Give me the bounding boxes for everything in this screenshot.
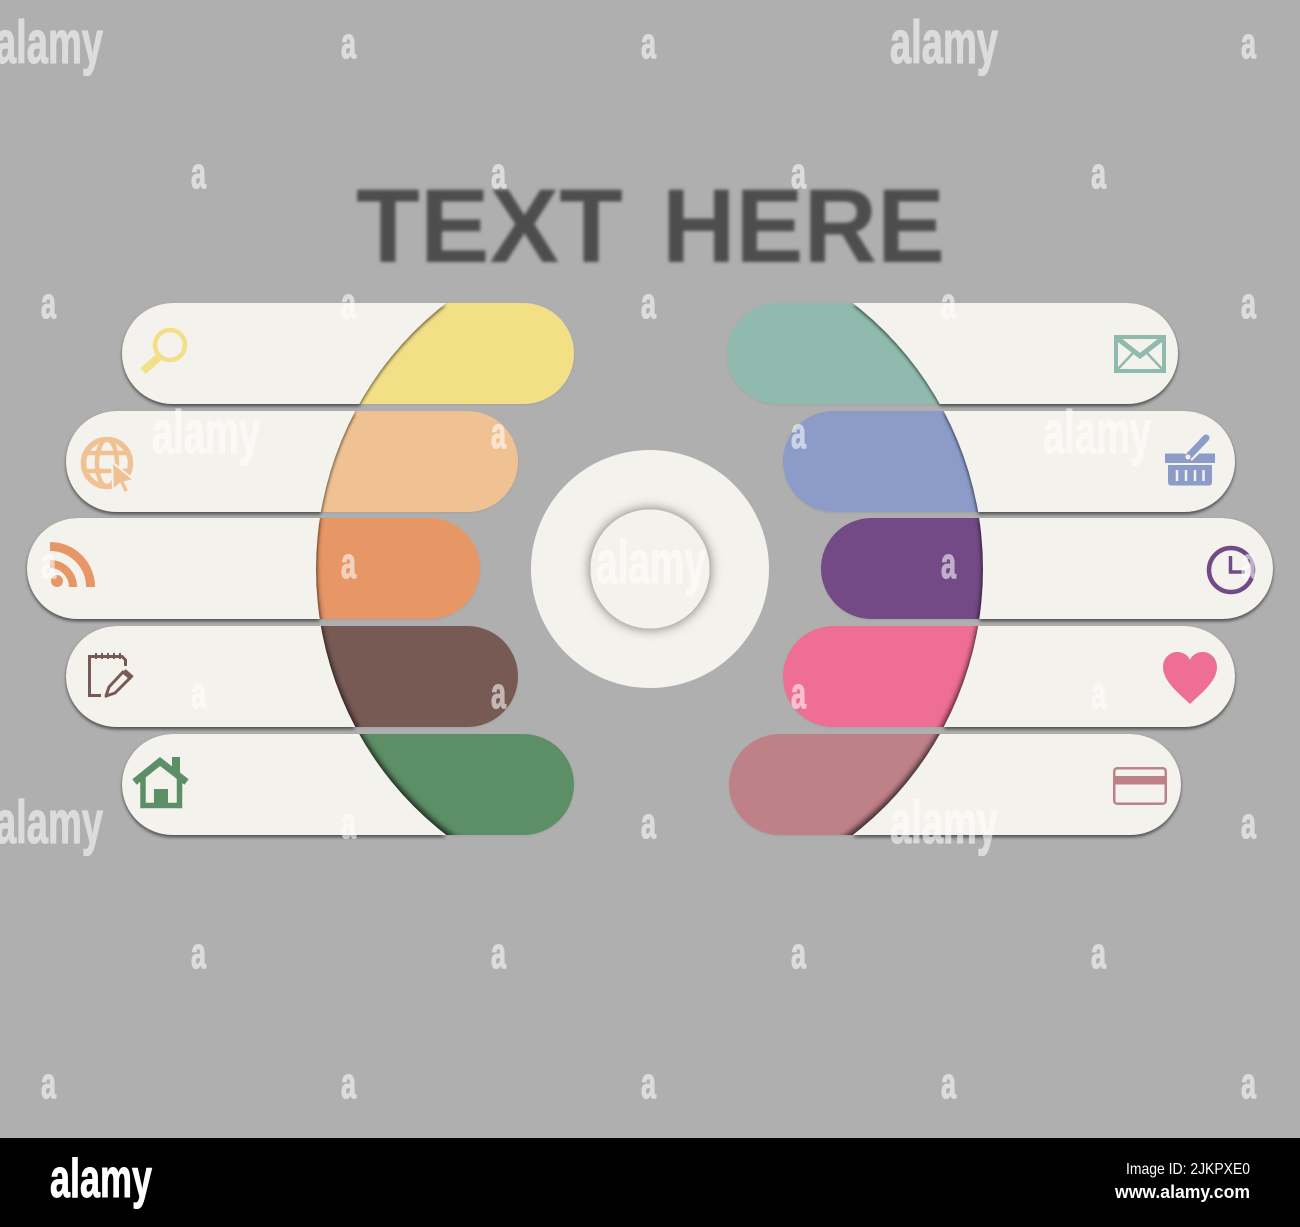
watermark: a (191, 929, 206, 978)
watermark: a (41, 539, 56, 588)
watermark: a (41, 279, 56, 328)
panel: right bar 5 card (729, 734, 1183, 840)
panel: left bar 1 search (120, 303, 574, 408)
watermark: a (941, 279, 956, 328)
watermark: alamy (890, 9, 998, 76)
watermark: a (1241, 539, 1256, 588)
icon: globe with cursor (84, 440, 134, 493)
watermark: a (491, 149, 506, 198)
cream strip (64, 626, 356, 732)
watermark: a (41, 1059, 56, 1108)
arc shadow (66, 411, 358, 512)
arc shadow (936, 626, 1235, 727)
arc shadow (975, 518, 1273, 619)
panel: left bar 5 home (120, 734, 574, 840)
watermark: a (1241, 19, 1256, 68)
watermark: a (1241, 279, 1256, 328)
watermark: a (1091, 149, 1106, 198)
watermark: a (791, 149, 806, 198)
watermark: a (341, 19, 356, 68)
coloured end: pink (783, 626, 1235, 727)
panel: left bar 2 web (64, 411, 518, 516)
cream strip (64, 411, 356, 516)
title: TEXT (356, 168, 623, 285)
watermark: a (641, 279, 656, 328)
coloured end: blue (783, 411, 1235, 512)
icon: heart (1163, 652, 1217, 704)
watermark: a (791, 929, 806, 978)
watermark: a (341, 799, 356, 848)
footer logo: alamy (50, 1147, 152, 1209)
coloured end: yellow (122, 303, 574, 404)
watermark: a (1241, 1059, 1256, 1108)
coloured end: teal (727, 303, 1178, 404)
watermark: a (191, 669, 206, 718)
outer disc (531, 450, 769, 688)
coloured end: brown (66, 626, 518, 727)
panel: right bar 1 mail (727, 303, 1180, 408)
cream strip (120, 734, 446, 840)
arc shadow (908, 303, 1178, 404)
panel: right bar 2 basket (783, 411, 1237, 516)
coloured end: orange (27, 518, 480, 619)
watermark: alamy (152, 399, 260, 466)
icon: clock (1209, 548, 1253, 592)
panel: left bar 4 notes (64, 626, 518, 732)
footer band (0, 1138, 1300, 1227)
watermark: a (341, 539, 356, 588)
watermark: alamy (0, 789, 103, 856)
watermark: a (1091, 929, 1106, 978)
footer background (0, 1138, 1300, 1227)
arc shadow (122, 734, 459, 835)
title (356, 168, 945, 285)
watermark: a (1091, 669, 1106, 718)
image id: Image ID: 2JKPXE0 (1126, 1161, 1250, 1178)
icon: house (134, 757, 186, 807)
arc shadow (66, 626, 362, 727)
watermark: a (191, 149, 206, 198)
arc shadow (840, 734, 1181, 835)
cream strip (120, 303, 447, 408)
watermark: a (1241, 799, 1256, 848)
watermark: a (641, 1059, 656, 1108)
watermark: a (641, 799, 656, 848)
watermark: a (791, 669, 806, 718)
icon: notepad with pencil (90, 653, 132, 697)
icon: rss (50, 546, 90, 587)
icon: magnifier (143, 330, 185, 371)
arc shadow (122, 303, 447, 404)
watermark: a (491, 929, 506, 978)
panel: right bar 4 heart (783, 626, 1237, 732)
coloured end: green (122, 734, 574, 835)
watermark: a (641, 19, 656, 68)
watermark: a (491, 409, 506, 458)
inner disc (590, 510, 710, 628)
watermark: a (341, 1059, 356, 1108)
cream strip (978, 518, 1275, 624)
watermark: alamy (596, 529, 706, 596)
watermark: alamy (1043, 399, 1151, 466)
panel: right bar 3 clock (821, 518, 1275, 624)
cream strip (852, 734, 1183, 840)
coloured end: purple (821, 518, 1273, 619)
watermark: a (791, 409, 806, 458)
watermark: alamy (890, 789, 998, 856)
watermark: a (941, 539, 956, 588)
panel: left bar 3 rss (25, 518, 480, 624)
watermark: a (941, 1059, 956, 1108)
centre circle (531, 450, 769, 688)
coloured end: rose (729, 734, 1181, 835)
title: HERE (662, 168, 945, 285)
site url: www.alamy.com (1114, 1182, 1250, 1202)
cream strip (942, 626, 1237, 732)
cream strip (25, 518, 322, 624)
watermark: a (491, 669, 506, 718)
arc shadow (27, 518, 325, 619)
watermark: alamy (0, 9, 103, 76)
cream strip (942, 411, 1237, 516)
coloured end: peach (66, 411, 518, 512)
icon: credit card (1114, 768, 1166, 804)
cream strip (852, 303, 1180, 408)
watermark: a (341, 279, 356, 328)
icon: envelope (1116, 337, 1164, 371)
icon: basket (1165, 438, 1215, 486)
arc shadow (942, 411, 1235, 512)
